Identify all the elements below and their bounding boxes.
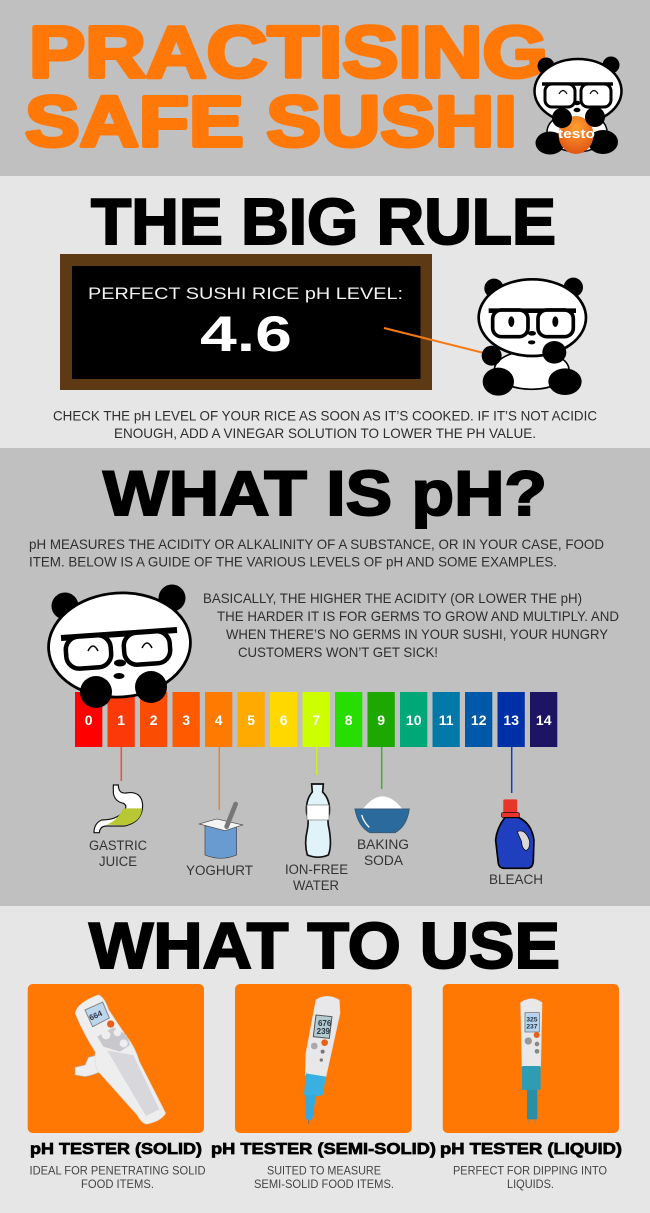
card: semi-solid tester bbox=[235, 984, 412, 1133]
title: PRACTISING bbox=[29, 12, 548, 93]
text: acidity explanation: WHEN THERE’S NO GERMS IN YOUR SUSHI, YOUR HUNGRY bbox=[226, 626, 609, 642]
chart: pH colour scale: 5 bbox=[247, 712, 255, 728]
heading: the big rule: THE BIG RULE bbox=[91, 186, 556, 258]
panel: title banner bbox=[0, 0, 650, 176]
caption: solid: FOOD ITEMS. bbox=[81, 1179, 154, 1191]
icon: semi-solid pH tester: 239 bbox=[317, 1027, 331, 1036]
chart: pH colour scale: 11 bbox=[439, 712, 454, 728]
icon: panda holding testo ball: testo bbox=[558, 127, 595, 141]
icon: solid pH tester: 664 bbox=[88, 1009, 104, 1022]
pointer stick bbox=[384, 328, 484, 353]
chart: pH colour scale: 14 bbox=[536, 712, 552, 728]
chart: pH colour scale: 12 bbox=[471, 712, 487, 728]
chart: pH colour scale: 6 bbox=[280, 712, 288, 728]
caption: liquid bbox=[440, 1141, 622, 1191]
title: SAFE SUSHI bbox=[25, 82, 517, 162]
icon: liquid pH tester: 325 bbox=[526, 1016, 538, 1023]
panel: the big rule bbox=[0, 176, 650, 448]
text: acidity explanation: THE HARDER IT IS FOR GERMS TO GROW AND MULTIPLY. AND bbox=[217, 608, 619, 624]
chalkboard: PERFECT SUSHI RICE pH LEVEL: bbox=[88, 285, 403, 303]
heading: what is pH: WHAT IS pH? bbox=[103, 459, 547, 529]
example: ion-free water bbox=[285, 784, 348, 893]
heading: what to use: WHAT TO USE bbox=[89, 910, 560, 982]
icon: liquid pH tester bbox=[521, 999, 542, 1123]
example: gastric juice: GASTRIC bbox=[89, 838, 147, 853]
chart: pH colour scale: 4 bbox=[215, 712, 223, 728]
text: pH definition: ITEM. BELOW IS A GUIDE OF THE VARIOUS LEVELS OF pH AND SOME EXAMPLES. bbox=[29, 554, 557, 570]
caption: solid bbox=[30, 1141, 206, 1191]
caption: solid: pH TESTER (SOLID) bbox=[30, 1141, 202, 1158]
example: gastric juice: JUICE bbox=[99, 854, 137, 869]
caption: liquid: LIQUIDS. bbox=[507, 1179, 554, 1191]
icon: panda holding testo ball bbox=[534, 56, 622, 154]
chart: pH colour scale: 0 bbox=[85, 712, 93, 728]
chart: pH colour scale: 3 bbox=[182, 712, 190, 728]
caption: solid: IDEAL FOR PENETRATING SOLID bbox=[30, 1166, 206, 1178]
card: solid tester bbox=[28, 984, 204, 1133]
example: baking soda bbox=[355, 796, 409, 868]
icon: smiling panda bbox=[45, 584, 194, 708]
icon: solid pH tester bbox=[75, 995, 166, 1124]
panel: what is pH bbox=[0, 448, 650, 906]
text: check the pH bbox=[53, 408, 597, 441]
chart: pH colour scale: 1 bbox=[117, 712, 125, 728]
example: baking soda: BAKING bbox=[357, 837, 409, 852]
text: check the pH: CHECK THE pH LEVEL OF YOUR RICE AS SOON AS IT’S COOKED. IF IT’S NOT ACIDIC bbox=[53, 408, 597, 424]
chart: pH colour scale bbox=[75, 692, 557, 747]
chart: pH colour scale: 8 bbox=[345, 712, 353, 728]
title bbox=[25, 12, 548, 162]
caption: semi-solid bbox=[211, 1141, 436, 1191]
example: yoghurt: YOGHURT bbox=[186, 863, 253, 878]
text: pH definition: pH MEASURES THE ACIDITY OR ALKALINITY OF A SUBSTANCE, OR IN YOUR CASE, FOOD bbox=[29, 536, 604, 552]
example: yoghurt bbox=[186, 804, 253, 878]
chalkboard bbox=[60, 254, 432, 390]
panel: what to use bbox=[0, 906, 650, 1213]
caption: semi-solid: SEMI-SOLID FOOD ITEMS. bbox=[254, 1179, 394, 1191]
icon: liquid pH tester: 237 bbox=[526, 1024, 538, 1031]
example: ion-free water: WATER bbox=[293, 878, 339, 893]
card: liquid tester bbox=[443, 984, 619, 1133]
chart: pH colour scale: 7 bbox=[312, 712, 320, 728]
connector lines bbox=[121, 747, 512, 810]
icon: panda teacher bbox=[479, 278, 586, 396]
example: bleach bbox=[489, 799, 543, 887]
example: bleach: BLEACH bbox=[489, 872, 543, 887]
example: ion-free water: ION-FREE bbox=[285, 862, 348, 877]
chart: pH colour scale: 10 bbox=[406, 712, 422, 728]
example: gastric juice bbox=[89, 785, 147, 869]
caption: liquid: pH TESTER (LIQUID) bbox=[440, 1141, 622, 1158]
text: acidity explanation: CUSTOMERS WON’T GET SICK! bbox=[238, 644, 438, 660]
caption: semi-solid: SUITED TO MEASURE bbox=[267, 1166, 381, 1178]
chart: pH colour scale: 2 bbox=[150, 712, 158, 728]
chart: pH colour scale: 13 bbox=[503, 712, 519, 728]
icon: semi-solid pH tester: 676 bbox=[318, 1019, 332, 1028]
caption: semi-solid: pH TESTER (SEMI-SOLID) bbox=[211, 1141, 436, 1158]
text: check the pH: ENOUGH, ADD A VINEGAR SOLUTION TO LOWER THE PH VALUE. bbox=[114, 425, 536, 441]
caption: liquid: PERFECT FOR DIPPING INTO bbox=[453, 1166, 607, 1178]
example: baking soda: SODA bbox=[364, 853, 403, 868]
icon: semi-solid pH tester bbox=[304, 996, 340, 1124]
chalkboard: 4.6 bbox=[200, 306, 292, 362]
text: acidity explanation bbox=[203, 590, 619, 660]
chart: pH colour scale: 9 bbox=[377, 712, 385, 728]
text: pH definition bbox=[29, 536, 604, 570]
text: acidity explanation: BASICALLY, THE HIGHER THE ACIDITY (OR LOWER THE pH) bbox=[203, 590, 582, 606]
